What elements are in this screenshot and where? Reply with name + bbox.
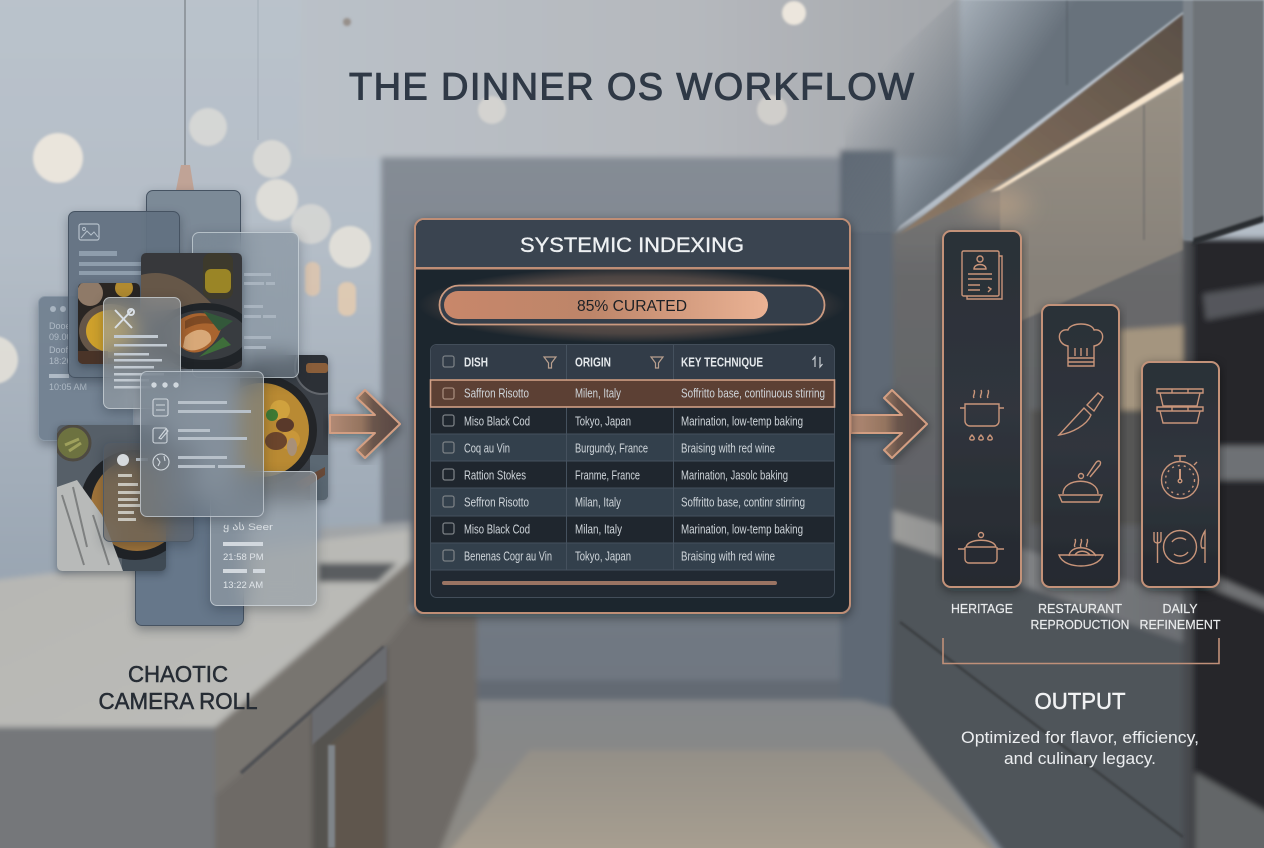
table rows: Marination, Jasolc baking — [681, 468, 788, 482]
table rows: Milan, Italy — [575, 522, 623, 536]
table rows: Burgundy, France — [575, 442, 648, 456]
table rows: Coq au Vin — [464, 442, 510, 456]
cluster: chaotic camera roll — [32, 188, 332, 636]
panel: heritage — [943, 231, 1021, 587]
card: right note card — [192, 232, 299, 378]
table rows: Miso Black Cod — [464, 522, 530, 536]
icon: chef knife — [1059, 393, 1103, 435]
arrow: camera roll to indexing — [330, 390, 400, 458]
panel labels — [951, 601, 1221, 632]
card: timestamp note: 21:58 PM — [223, 552, 264, 563]
title: THE DINNER OS WORKFLOW — [349, 66, 914, 108]
table rows: Miso Black Cod — [464, 414, 530, 428]
icon: lidded pot — [958, 532, 1004, 563]
card: left clock card: Doof — [49, 345, 69, 355]
heading: chaotic camera roll: CAMERA ROLL — [98, 688, 258, 714]
pendant lamp — [176, 0, 258, 190]
card: timestamp note: ყ ას Seer — [223, 521, 273, 533]
icon: serving cloche — [1059, 461, 1102, 502]
panel: restaurant reproduction — [1042, 305, 1119, 587]
output heading: OUTPUT — [1034, 688, 1126, 714]
card: utensils note — [103, 297, 181, 409]
table rows: Seffron Risotto — [464, 496, 529, 510]
table: dish index — [430, 344, 834, 598]
table rows: Tokyo, Japan — [575, 414, 631, 428]
table rows: Soffritto base, continuous stirring — [681, 386, 825, 400]
card: left clock card: 10:05 AM — [49, 382, 87, 392]
card: top back — [146, 190, 241, 310]
icon: steaming pot — [960, 390, 1004, 440]
table header: ORIGIN — [575, 356, 611, 370]
output description: and culinary legacy. — [1004, 749, 1156, 768]
card: left clock card: Dooe — [49, 321, 71, 331]
photo: rice bowl with linen — [57, 425, 166, 571]
table scrollbar — [442, 581, 777, 585]
icon: recipe document — [962, 251, 1002, 299]
table rows: Milen, Italy — [575, 386, 622, 400]
table rows: Saffron Risotto — [464, 386, 529, 400]
table rows: Marination, low-temp baking — [681, 414, 803, 428]
filter and sort icons — [544, 357, 822, 368]
icon: stopwatch — [1162, 456, 1198, 498]
table rows: Benenas Cogr au Vin — [464, 550, 552, 564]
photo: seared fish — [141, 253, 242, 369]
card: frosted checklist — [140, 371, 264, 517]
card: image note card — [68, 211, 180, 378]
icon: plated dish — [1059, 539, 1103, 566]
card: timestamp note: 13:22 AM — [223, 580, 263, 591]
heading: chaotic camera roll — [98, 661, 258, 714]
heading: chaotic camera roll: CHAOTIC — [128, 661, 228, 687]
photo: fish in bowl behind — [240, 355, 328, 500]
card: tall bottom back — [135, 500, 244, 626]
table rows: Braising with red wine — [681, 442, 775, 456]
card: moon note — [103, 442, 194, 542]
panel labels: HERITAGE — [951, 601, 1013, 616]
icon: meal prep containers — [1157, 389, 1203, 423]
table header: KEY TECHNIQUE — [681, 356, 763, 370]
progress bar: 85% curated: 85% CURATED — [577, 298, 687, 315]
card: left clock card — [38, 296, 134, 441]
output bracket — [943, 638, 1219, 664]
row checkboxes — [443, 356, 454, 561]
panel: daily refinement — [1142, 362, 1219, 587]
icon: plate and cutlery — [1154, 530, 1205, 564]
panel labels: REPRODUCTION — [1030, 617, 1130, 632]
output description — [961, 728, 1199, 768]
panel: systemic indexing — [415, 219, 850, 613]
table rows — [464, 386, 825, 564]
panel labels: RESTAURANT — [1038, 601, 1122, 616]
bokeh lights — [0, 1, 806, 384]
table rows: Tokyo, Japan — [575, 550, 631, 564]
table rows: Rattion Stokes — [464, 468, 526, 482]
card: left clock card: 18:26 — [49, 356, 72, 366]
table rows: Franme, France — [575, 468, 640, 482]
arrow: indexing to output — [851, 390, 927, 458]
table rows: Soffritto base, continr stirring — [681, 496, 805, 510]
table rows: Milan, Italy — [575, 496, 622, 510]
table rows: Braising with red wine — [681, 550, 775, 564]
highlighted row — [430, 380, 834, 407]
photo: risotto bowl — [78, 283, 140, 364]
panel heading: SYSTEMIC INDEXING — [520, 233, 744, 257]
table header — [464, 356, 763, 370]
icon: chef hat — [1059, 324, 1103, 366]
card: timestamp note — [210, 471, 317, 606]
table header: DISH — [464, 356, 488, 370]
output description: Optimized for flavor, efficiency, — [961, 728, 1199, 747]
table rows: Marination, low-temp baking — [681, 522, 803, 536]
panel labels: REFINEMENT — [1140, 617, 1221, 632]
progress bar: 85% curated — [440, 286, 824, 324]
panel labels: DAILY — [1162, 601, 1198, 616]
card: left clock card: 09.00 — [49, 332, 72, 342]
